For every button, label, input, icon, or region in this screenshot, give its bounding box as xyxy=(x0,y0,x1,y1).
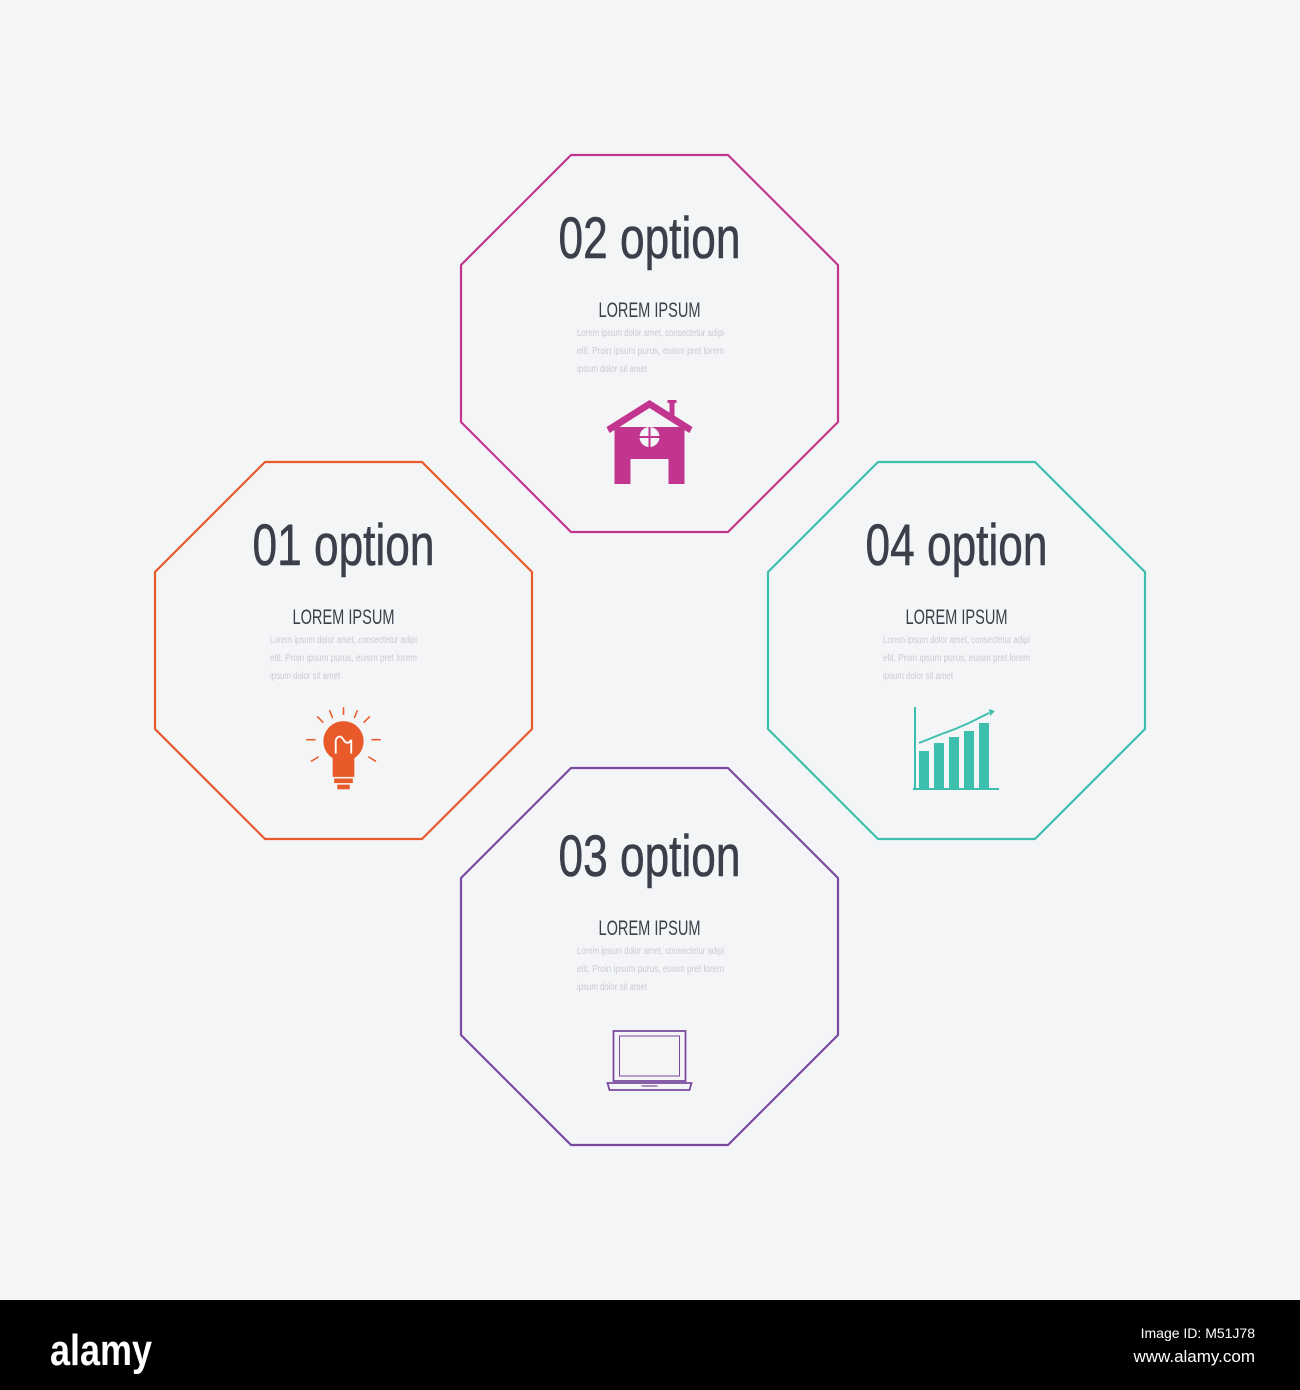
logo: alamy: alamy xyxy=(50,1326,152,1375)
body text: elit. Proin ipsum purus, euism pret lorem xyxy=(577,964,724,975)
panel: option 03 xyxy=(461,768,838,1145)
heading: 02 option: 02 option xyxy=(558,206,740,271)
panel: option 02 xyxy=(461,155,838,532)
body text: Lorem ipsum dolor amet, consectetur adipi xyxy=(577,946,724,957)
subheading: LOREM IPSUM xyxy=(292,606,394,629)
heading: 04 option: 04 option xyxy=(866,513,1048,578)
body text xyxy=(577,946,724,993)
body text: Lorem ipsum dolor amet, consectetur adipi xyxy=(883,635,1030,646)
url: www.alamy.com xyxy=(1132,1347,1255,1366)
icon: house xyxy=(606,400,692,484)
image id: Image ID: M51J78 xyxy=(1141,1325,1255,1341)
body text: ipsum dolor sit amet xyxy=(577,364,647,375)
icon: light bulb xyxy=(306,707,381,789)
subheading: LOREM IPSUM xyxy=(598,917,700,940)
panel: option 01 xyxy=(155,462,532,839)
body text: ipsum dolor sit amet xyxy=(270,671,340,682)
body text: Lorem ipsum dolor amet, consectetur adipi xyxy=(577,328,724,339)
body text xyxy=(577,328,724,375)
icon: bar chart xyxy=(913,707,999,789)
body text xyxy=(270,635,417,682)
subheading: LOREM IPSUM xyxy=(598,299,700,322)
panel: option 04 xyxy=(768,462,1145,839)
body text: ipsum dolor sit amet xyxy=(577,982,647,993)
subheading: LOREM IPSUM xyxy=(906,606,1008,629)
heading: 03 option: 03 option xyxy=(558,824,740,889)
body text: elit. Proin ipsum purus, euism pret lorem xyxy=(577,346,724,357)
body text: Lorem ipsum dolor amet, consectetur adipi xyxy=(270,635,417,646)
body text: elit. Proin ipsum purus, euism pret lorem xyxy=(883,653,1030,664)
body text: elit. Proin ipsum purus, euism pret lorem xyxy=(270,653,417,664)
body text xyxy=(883,635,1030,682)
body text: ipsum dolor sit amet xyxy=(883,671,953,682)
footer bar xyxy=(0,1300,1300,1390)
heading: 01 option: 01 option xyxy=(252,513,434,578)
icon: laptop xyxy=(608,1031,692,1090)
